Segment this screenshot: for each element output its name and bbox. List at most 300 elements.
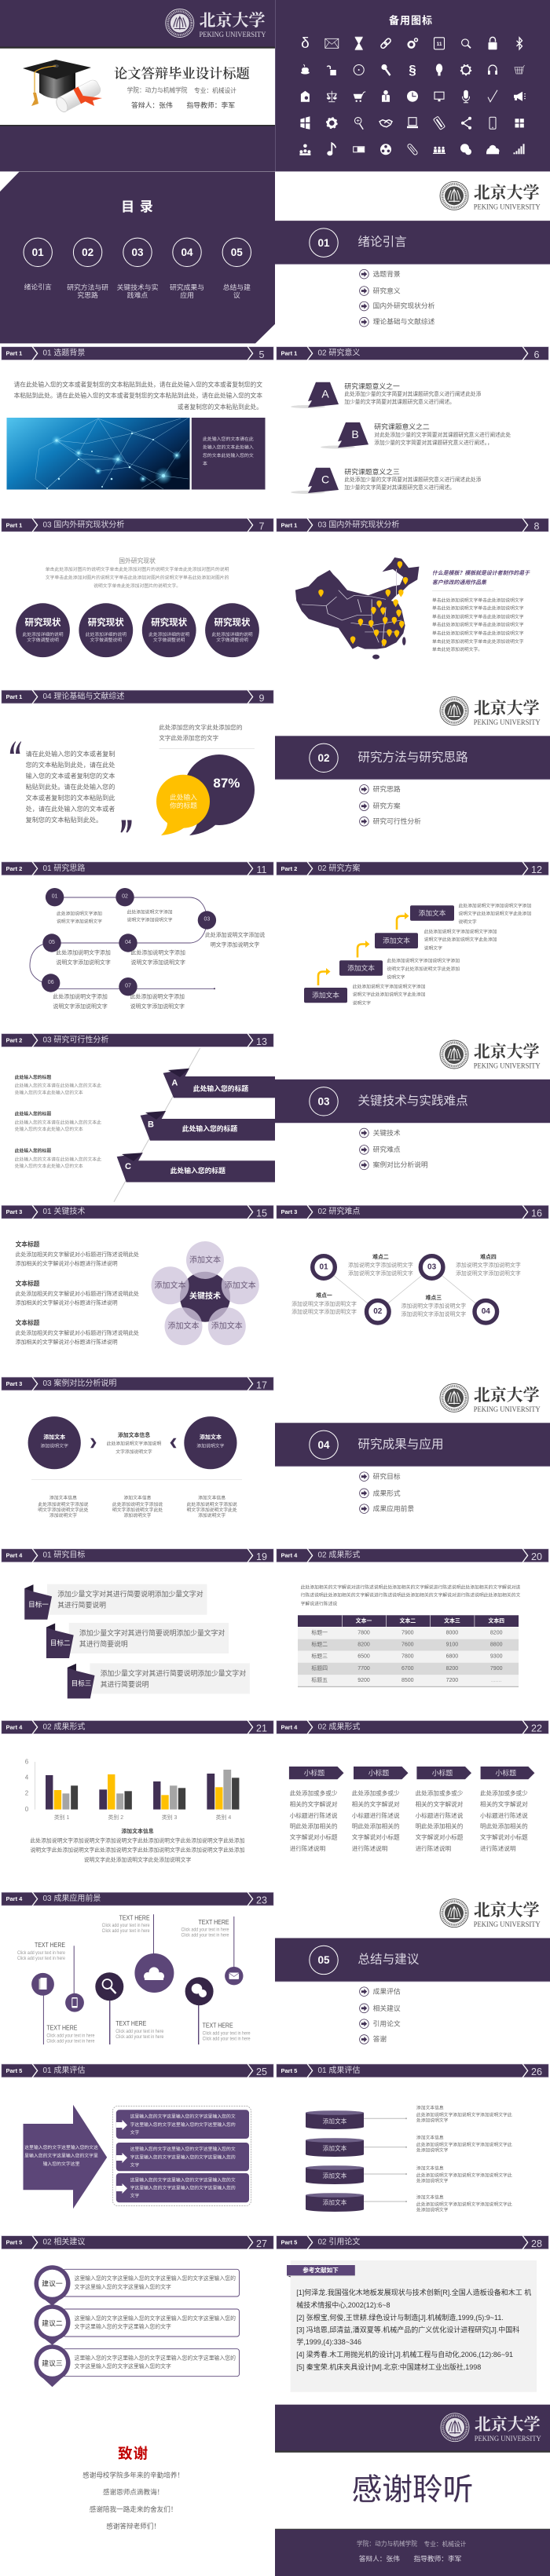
slide 27 header: Part 5	[6, 2239, 22, 2246]
slide 6 header: 6	[534, 349, 540, 360]
slide 22 column 1	[289, 1767, 344, 1852]
slide 23 text labels: Click add your text in here	[203, 2032, 251, 2037]
slide 11 node notes: 说明文字添加说明文字	[57, 919, 102, 925]
logo: 北京大学	[474, 181, 540, 204]
slide 26 row 4: 添加文本	[323, 2198, 347, 2206]
bullet list: 理论基础与文献综述	[373, 317, 435, 326]
slide 20 data table: 7900	[490, 1666, 503, 1672]
heading: contents: 目 录	[121, 199, 154, 214]
slide 22 column 2: 文字解说对小标题	[352, 1832, 400, 1840]
slide 17 three columns: 明文字添加说明文字此处	[38, 1507, 89, 1513]
slide 17 right circle: 添加文本	[200, 1434, 222, 1440]
slide 17 centre text: 文字添加说明文字	[116, 1449, 152, 1455]
section band: 04	[317, 1439, 330, 1451]
slide 28 ribbon: 参考文献如下	[302, 2266, 339, 2274]
closing info 2: 答辩人：张伟	[359, 2555, 400, 2563]
slide 21 caption: 说明文字此处添加说明文字此处添加说明文字此处添加说明文字此处添加说明文字此处添加	[30, 1847, 245, 1853]
slide 26 row 3: 此处添加说明文字添加说明文字添加说明文字此	[416, 2172, 512, 2178]
slide 26 row 3: 添加文本	[323, 2172, 347, 2180]
slide 9 quote marks	[10, 741, 132, 832]
slide 11 node notes: 此处添加说明文字添加	[130, 992, 185, 1000]
slide 17 three columns: 明文字添加说明文字此处	[186, 1507, 237, 1513]
slide 12 step 2: 此处添加说明文字添加说明文字添加	[387, 958, 460, 964]
slide 13 band A: 此处输入您的标题	[193, 1083, 248, 1092]
slide 26 row 3: 添加文本信息	[416, 2165, 444, 2171]
slide 22 column 3	[416, 1767, 471, 1852]
logo: PEKING UNIVERSITY	[474, 1920, 541, 1928]
slide 26 row 3: 处添加说明文字	[416, 2177, 449, 2183]
slide 19 goal 3: 其进行简要说明	[101, 1679, 149, 1688]
slide 16 connector	[324, 1267, 486, 1312]
logo: 北京大学	[474, 1898, 540, 1921]
slide 6 item C: C	[321, 473, 329, 486]
slide 17 three columns: 添加文本信息	[198, 1494, 226, 1500]
bullet list	[360, 269, 435, 327]
slide 22 column 3: 相关的文字解说对	[416, 1800, 464, 1807]
title: thesis defense: 论文答辩毕业设计标题	[114, 63, 250, 82]
slide 20 data table: 7600	[402, 1642, 414, 1647]
slide 21 header: 21	[256, 1723, 267, 1734]
slide 26 row 4: 添加文本信息	[416, 2194, 444, 2201]
slide 8 header	[277, 518, 548, 532]
slide 5 paragraph: 请在此处输入您的文本或者复制您的文本粘贴到此处，请在此处输入您的文本或者复制您的文	[14, 380, 262, 388]
item 03: 践难点	[127, 290, 148, 299]
slide 25 row 2	[116, 2143, 249, 2171]
slide 28 reference list: [2] 张根宝,何俊,王世耕.绿色设计与制造[J].机械制造,1999,(5):9~11.	[296, 2313, 504, 2322]
slide 7 circle 1: 此处添加详细的说明	[22, 631, 64, 638]
slide 12 step 3: 添加文本	[383, 936, 410, 945]
slide 16 labels: 难点三	[425, 1294, 442, 1301]
slide 23 text labels: Click add your text in here	[181, 1934, 229, 1938]
slide 6 item C	[291, 467, 482, 494]
slide 13 band C: 此处输入您的标题	[170, 1166, 226, 1175]
bullet list	[360, 1472, 414, 1513]
slide 9 paragraph: 处，请在此处输入您的文本或者	[26, 805, 115, 813]
slide 25 row 2: 这里输入您的文字这里输入您的文字这里输入您的文	[130, 2146, 236, 2152]
slide 5 purple text box: 此处输入您的文本请在此	[203, 436, 254, 442]
slide 12 step 2: 说明文字	[387, 974, 405, 980]
slide 12 step 4: 此处添加说明文字添加说明文字添加	[459, 902, 531, 908]
slide 9 paragraph: 您的文本粘贴到此处，请在此处	[26, 761, 115, 769]
slide 12 step 3: 说明文字此处添加说明文字此处添加	[424, 937, 497, 943]
slide 22 column 4: 进行陈述说明	[480, 1844, 516, 1852]
slide 21 bar chart: 0	[25, 1806, 29, 1813]
slide 23 text labels: Click add your text in here	[116, 2030, 164, 2034]
slide 28 reference list: 学,1999,(4):338~346	[296, 2337, 361, 2346]
slide 22 column 3: 小标题	[432, 1768, 453, 1777]
slide 4: section 01	[275, 181, 550, 327]
slide 27 suggestion 1: 这里输入您的文字这里输入您的文字这里输入您的文字这里输入您的	[75, 2275, 236, 2282]
slide 25 row 3: 字这里输入您的文字这里输入您的文字这里输入您的	[130, 2184, 236, 2191]
slide 5 header: 01 选题背景	[42, 348, 85, 358]
slide 22 column 3: 进行陈述说明	[416, 1844, 452, 1852]
slide 16 nodes	[313, 1256, 497, 1323]
section band: 总结与建议	[358, 1953, 420, 1967]
slide 26 row 1: 处添加说明文字	[416, 2117, 449, 2124]
slide 8 header: 03 国内外研究现状分析	[317, 519, 399, 529]
icon grid: §	[409, 63, 416, 77]
item 02: 02	[82, 247, 94, 258]
bullet list: 研究难点	[373, 1145, 401, 1153]
slide 20 data table: 9100	[446, 1642, 458, 1647]
slide 22 column 2: 进行陈述说明	[352, 1844, 388, 1852]
slide 20 data table: 7700	[358, 1666, 370, 1672]
slide 23 text labels: TEXT HERE	[198, 1919, 229, 1926]
slide 16 nodes: 01	[319, 1262, 328, 1272]
slide 17 header	[2, 1377, 273, 1390]
icon grid	[299, 35, 526, 155]
item 04	[170, 238, 204, 299]
slide 6 item A	[291, 382, 482, 408]
slide 16 labels: 添加说明文字添加说明文字	[292, 1308, 357, 1315]
slide 17 three columns: 此处添加说明文字添加说	[38, 1501, 89, 1507]
slide 25 big arrow: 输入您的文字这里	[43, 2161, 80, 2167]
icon: graduation cap and diploma	[23, 60, 103, 114]
slide 12 step 4: 说明文字此处添加说明文字此处添加	[459, 911, 531, 917]
slide 23 text labels: TEXT HERE	[119, 1914, 150, 1922]
bullet list: 研究思路	[373, 784, 401, 793]
bullet list: 成果评估	[373, 1987, 401, 1996]
slide 19 goal 2: 其进行简要说明	[79, 1639, 128, 1648]
bullet list	[360, 784, 421, 826]
logo: 北京大学	[474, 696, 540, 719]
slide 5 header: 5	[259, 349, 265, 360]
slide 7 circle 4: 研究现状	[214, 616, 251, 627]
slide 20 data table: 文本四	[488, 1617, 504, 1624]
section band: 研究方法与研究思路	[358, 750, 468, 764]
slide 25 dashed frame	[112, 2106, 251, 2206]
slide 12 step 3	[375, 929, 497, 951]
slide 16 labels: 添加说明文字添加说明文字	[401, 1310, 466, 1317]
slide 29 thanks text: 感谢恩师点滴教诲！	[103, 2487, 163, 2496]
heading: spare icons: 备用图标	[389, 14, 433, 27]
slide 15 text blocks: 此处添加相关的文字解说对小标题进行陈述说明此处	[16, 1251, 139, 1258]
slide 13 band A	[163, 1069, 275, 1098]
slide 25 header: Part 5	[6, 2067, 22, 2074]
slide 20 paragraph: 此处添加相关的文字解说对进行陈述说明此处添加相关的文字解说进行陈述说明此处添加相关的文字解说对进	[301, 1584, 521, 1591]
slide 13 band B	[141, 1111, 275, 1141]
slide 25 big arrow: 这里输入您的文字这里输入您的文这	[24, 2144, 98, 2150]
slide 11 nodes: 01	[52, 894, 58, 900]
slide 12 step 2: 说明文字此处添加说明文字此处添加	[387, 966, 460, 972]
bullet list: 成果应用前景	[373, 1504, 414, 1512]
slide 23 text labels: Click add your text in here	[203, 2037, 251, 2042]
slide 27 header	[2, 2235, 273, 2249]
slide 7 intro text: 文字单击此处添加对图片的说明文字单击此处添加对图片的说明文字单击此处添加对图片的	[46, 574, 229, 580]
closing info 2: 指导教师：李军	[413, 2554, 462, 2563]
slide 11 node notes: 此处添加说明文字添加	[130, 948, 185, 956]
bullet list: 引用论文	[373, 2019, 401, 2027]
item 02: 究思路	[77, 290, 98, 299]
slide 13 header	[2, 1033, 273, 1047]
slide 19 header: Part 4	[6, 1552, 23, 1559]
slide 27 suggestion 1: 建议一	[42, 2278, 63, 2287]
cover info line 2: 答辩人：张伟	[131, 101, 173, 109]
slide 12 step 4: 添加文本	[419, 908, 446, 917]
slide 27 header: 02 相关建议	[42, 2237, 85, 2247]
logo	[440, 1383, 541, 1413]
slide 19 goal 1	[24, 1584, 207, 1620]
slide 7 circle 2	[79, 603, 133, 657]
slide 29 thanks text	[82, 2470, 184, 2530]
slide 15 header: 15	[256, 1208, 267, 1219]
item 02: 研究方法与研	[67, 283, 108, 291]
slide 16 labels: 难点一	[316, 1292, 332, 1299]
closing info 1: 学院：动力与机械学院	[357, 2541, 417, 2547]
slide 16 labels: 添加说明文字添加说明文字	[401, 1302, 466, 1310]
slide 23 search node	[95, 1972, 123, 2001]
slide 11 node notes: 说明文字添加说明文字	[53, 1003, 108, 1010]
slide 6 item B: 添加少量的文字简要对其课题研究意义进行阐述。，	[374, 439, 493, 446]
slide 16 labels: 添加说明文字添加说明文字	[456, 1270, 521, 1277]
slide 22 column 4: 文字解说对小标题	[480, 1832, 528, 1840]
slide 23 header	[2, 1892, 273, 1906]
slide 17 three columns: 添加说明文字	[198, 1512, 226, 1518]
slide 6 header: 02 研究意义	[317, 348, 360, 358]
slide 5 paragraph: 或者复制您的文本粘贴到此处。	[178, 403, 262, 411]
slide 11 node notes: 说明文字添加说明文字	[130, 959, 185, 966]
slide 23 header: Part 4	[6, 1895, 23, 1902]
slide 20 data table: 6500	[358, 1653, 370, 1660]
slide 23 header: 23	[256, 1895, 267, 1906]
slide 6 header	[277, 346, 548, 360]
slide 7 header: Part 1	[6, 521, 22, 528]
slide 23 text labels: Click add your text in here	[17, 1951, 66, 1956]
slide 25 row 3	[116, 2173, 249, 2202]
slide 15 header: 01 关键技术	[42, 1206, 85, 1216]
slide 13 left notes	[15, 1074, 101, 1169]
bullet list: 案例对比分析说明	[373, 1160, 428, 1169]
slide 7 intro text	[46, 557, 229, 589]
slide 2: spare icons	[275, 0, 550, 171]
slide 11 node notes: 说明文字添加说明文字	[56, 959, 111, 966]
slide 12 yellow arrows	[318, 912, 409, 985]
slide 26 row 2: 此处添加说明文字添加说明文字添加说明文字此	[416, 2141, 512, 2147]
slide 7 intro text: 说明文字单击此处添加对图片的说明文字。	[94, 583, 181, 589]
slide 16 labels: 添加说明文字添加说明文字	[456, 1261, 521, 1269]
slide 22 column 2: 小标题进行陈述说	[352, 1811, 400, 1819]
slide 9 paragraph: 粘贴到此处。请在此处输入您的	[26, 783, 115, 791]
icon grid: δ	[301, 35, 310, 52]
slide 28 header	[277, 2235, 548, 2249]
slide 11 nodes: 07	[125, 983, 131, 989]
slide 27 suggestion 3	[35, 2344, 239, 2387]
slide 20 data table: .......	[491, 1678, 502, 1683]
slide 16 nodes: 02	[373, 1307, 383, 1316]
slide 15 flower diagram: 关键技术	[189, 1291, 221, 1301]
cover info line 2: 指导教师：李军	[187, 100, 235, 109]
slide 20 data table: 7800	[358, 1630, 370, 1636]
slide 20 data table: 8200	[490, 1630, 503, 1636]
slide 9 right caption: 文字此处添加您的文字	[159, 733, 219, 741]
logo	[440, 181, 541, 211]
slide 11 nodes: 05	[49, 940, 55, 945]
cover info line 1: 学院：动力与机械学院	[127, 86, 187, 94]
slide 22 column 2: 小标题	[368, 1768, 389, 1777]
slide 12 header: Part 2	[281, 865, 297, 872]
slide 21 header: Part 4	[6, 1723, 23, 1730]
slide 22 column 1: 小标题进行陈述说	[290, 1811, 338, 1819]
slide 17 right circle: 添加说明文字	[196, 1442, 225, 1449]
slide 8 China map	[295, 557, 419, 660]
slide 19 goal 2: 目标二	[50, 1639, 71, 1647]
slide 22 column 2: 此处添加或多或少	[352, 1789, 400, 1796]
slide 26 row 2: 添加文本信息	[416, 2134, 444, 2140]
slide 28 reference list	[296, 2288, 531, 2371]
slide 7 circle 3: 文字做调整说明	[153, 637, 185, 643]
slide 27 suggestion 3: 这里输入您的文字这里输入您的文字这里输入您的文字这里输入您的	[75, 2354, 236, 2362]
logo	[440, 696, 541, 726]
slide 27 suggestion 2: 这里输入您的文字这里输入您的文字这里输入您的文字这里输入您的	[75, 2315, 236, 2322]
slide 15 flower diagram: 添加文本	[225, 1280, 256, 1291]
item 03: 关键技术与实	[117, 283, 159, 291]
logo: PEKING UNIVERSITY	[474, 1061, 541, 1069]
slide 9 right caption: 此处添加您的文字此处添加您的	[159, 723, 243, 731]
slide 14: section 03	[275, 1039, 550, 1170]
slide 22 column 1: 相关的文字解说对	[290, 1800, 338, 1807]
section band: 研究成果与应用	[358, 1436, 444, 1451]
slide 28 reference list: [5] 秦宝荣.机床夹具设计[M].北京:中国建材工业出版社,1998	[296, 2362, 481, 2371]
slide 25 row 1: 文字	[130, 2129, 139, 2136]
slide 20 data table: 6700	[402, 1666, 414, 1672]
slide 9 header: 04 理论基础与文献综述	[42, 691, 124, 701]
slide 5 purple text box	[192, 418, 266, 490]
slide 22 column 3: 明此处添加相关的	[416, 1821, 464, 1829]
slide 29 thanks text: 感谢母校学院多年来的辛勤培养！	[82, 2470, 184, 2479]
slide 11 nodes: 03	[204, 917, 210, 922]
slide 8 header: Part 1	[281, 521, 297, 528]
bullet list: 相关建议	[373, 2004, 401, 2012]
bullet list: 研究意义	[373, 286, 401, 294]
slide 6 header: Part 1	[281, 350, 297, 357]
logo: 北京大学	[474, 1383, 540, 1406]
slide 5 paragraph: 本粘贴到此处。请在此处输入您的文本或者复制您的文本粘贴到此处，请在此处输入您的文本	[14, 391, 262, 399]
slide 15 text blocks: 此处添加相关的文字解说对小标题进行陈述说明此处	[16, 1290, 139, 1297]
logo: Peking University white: PEKING UNIVERSITY	[199, 31, 266, 38]
slide 8 body text: 单击此处添加说明文字单击此处添加说明文字	[432, 605, 524, 612]
slide 23 text labels: Click add your text in here	[102, 1929, 150, 1934]
slide 3: contents	[0, 172, 275, 343]
slide 20 data table: 7200	[446, 1678, 458, 1683]
logo: PEKING UNIVERSITY	[474, 718, 541, 726]
slide 26 row 1: 添加文本信息	[416, 2105, 444, 2111]
logo: 北京大学	[474, 1039, 540, 1062]
slide 25 row 2: 文字	[130, 2162, 139, 2169]
slide 9 speech bubbles: 87%	[213, 776, 240, 791]
slide 7 circle 1: 研究现状	[25, 616, 61, 627]
slide 28 reference list: 械技术情报中心,2002(12):6~8	[296, 2300, 390, 2309]
slide 23 wechat node	[185, 1977, 214, 2005]
closing info 1: 专业：机械设计	[424, 2539, 467, 2547]
slide 10: section 02	[275, 696, 550, 826]
icon grid: 11	[437, 42, 442, 47]
slide 26 row 1	[306, 2105, 512, 2129]
slide 17 chevrons	[90, 1438, 176, 1448]
section band	[275, 736, 550, 780]
slide 20 header	[277, 1548, 548, 1562]
slide 17 three columns: 添加说明文字	[50, 1512, 77, 1518]
slide 23 text labels: TEXT HERE	[35, 1942, 65, 1949]
item 01: 01	[32, 247, 44, 258]
slide 23 text labels: Click add your text in here	[17, 1957, 66, 1961]
logo: PEKING UNIVERSITY	[474, 1405, 541, 1413]
slide 6 item A: 此处添加少量的文字简要对其课题研究意义进行阐述此处添	[344, 390, 482, 397]
slide 20 data table: 标题一	[311, 1628, 328, 1636]
slide 11 node notes: 说明文字添加说明文字	[130, 1003, 185, 1010]
slide 13 header: Part 2	[6, 1037, 22, 1044]
slide 11 node notes: 明文字添加说明文字	[211, 941, 259, 948]
slide 30: closing	[275, 2405, 550, 2576]
item 04: 研究成果与	[170, 283, 204, 291]
slide 25 header: 25	[256, 2066, 267, 2077]
item 04: 应用	[180, 290, 194, 299]
slide 17 three columns	[38, 1494, 237, 1518]
logo: PEKING UNIVERSITY	[475, 2435, 541, 2443]
slide 9 speech bubbles: 你的标题	[170, 801, 197, 809]
slide 22 column 2	[352, 1767, 409, 1852]
slide 12 header: 02 研究方案	[317, 863, 360, 873]
slide 5 header	[2, 346, 273, 360]
slide 19 header: 01 研究目标	[42, 1550, 85, 1560]
slide 19 goal 1: 添加少量文字对其进行简要说明添加少量文字对	[57, 1590, 204, 1599]
slide 16 labels: 添加说明文字添加说明文字	[292, 1300, 357, 1307]
slide 17 three columns: 添加文本信息	[50, 1494, 77, 1500]
slide 22 column 4	[480, 1767, 534, 1852]
slide 9 paragraph: 文本或者复制您的文本粘贴到此	[26, 794, 115, 802]
slide 27 suggestion 1	[35, 2265, 239, 2306]
section band: 关键技术与实践难点	[358, 1094, 468, 1108]
slide 19 header: 19	[256, 1551, 267, 1562]
slide 13 left notes: 此处输入您的文本请在此处输入您的文本此	[15, 1083, 101, 1089]
slide 16 nodes: 03	[427, 1262, 437, 1272]
slide 12 step 2	[339, 958, 460, 980]
slide 6 item A: A	[321, 388, 329, 400]
slide 20 data table: 标题四	[311, 1664, 328, 1672]
slide 13 left notes: 此处输入您的文本请在此处输入您的文本此	[15, 1119, 101, 1125]
slide 22 column 1: 此处添加或多或少	[290, 1789, 338, 1796]
slide 20 data table: 8500	[402, 1678, 414, 1683]
slide 17 three columns: 添加文本信息	[123, 1494, 152, 1500]
item 01	[24, 238, 52, 291]
slide 7 circle 4: 此处添加详细的说明	[211, 631, 253, 638]
slide 17 three columns: 此处添加说明文字添加说	[112, 1501, 163, 1507]
slide 27 suggestion 2: 文字这里输入您的文字这里输入您的文字	[75, 2322, 171, 2330]
slide 7 circle 2: 此处添加详细的说明	[86, 631, 126, 638]
slide 12 step 1: 说明文字	[353, 999, 371, 1006]
slide 22 header: Part 4	[281, 1723, 298, 1730]
item 05: 05	[231, 247, 243, 258]
slide 12 step 1: 说明文字此处添加说明文字此处添加	[353, 992, 426, 998]
slide 7 circle 4: 文字做调整说明	[216, 637, 248, 643]
slide 6 item B: B	[351, 428, 359, 440]
slide 12 step 2: 添加文本	[347, 963, 375, 972]
slide 26 row 2: 处添加说明文字	[416, 2147, 449, 2153]
slide 20 data table: 6800	[446, 1653, 458, 1660]
slide 5 network image	[6, 418, 190, 490]
slide 19 goal 2: 添加少量文字对其进行简要说明添加少量文字对	[79, 1628, 225, 1637]
slide 8 italic headline	[432, 570, 530, 586]
section band: 01	[317, 237, 330, 249]
slide 22 column 1: 小标题	[304, 1768, 324, 1777]
slide 23 text labels: Click add your text in here	[46, 2040, 95, 2044]
slide 17 three columns: 添加说明文字	[123, 1512, 152, 1518]
slide 26 row 4: 处添加说明文字	[416, 2207, 449, 2213]
slide 21 bar chart: 类别 4	[216, 1814, 231, 1821]
section band	[275, 1080, 550, 1124]
slide 26 header: 26	[531, 2066, 542, 2077]
slide 16 header	[277, 1205, 548, 1219]
slide 26 row 1: 添加文本	[323, 2117, 347, 2125]
